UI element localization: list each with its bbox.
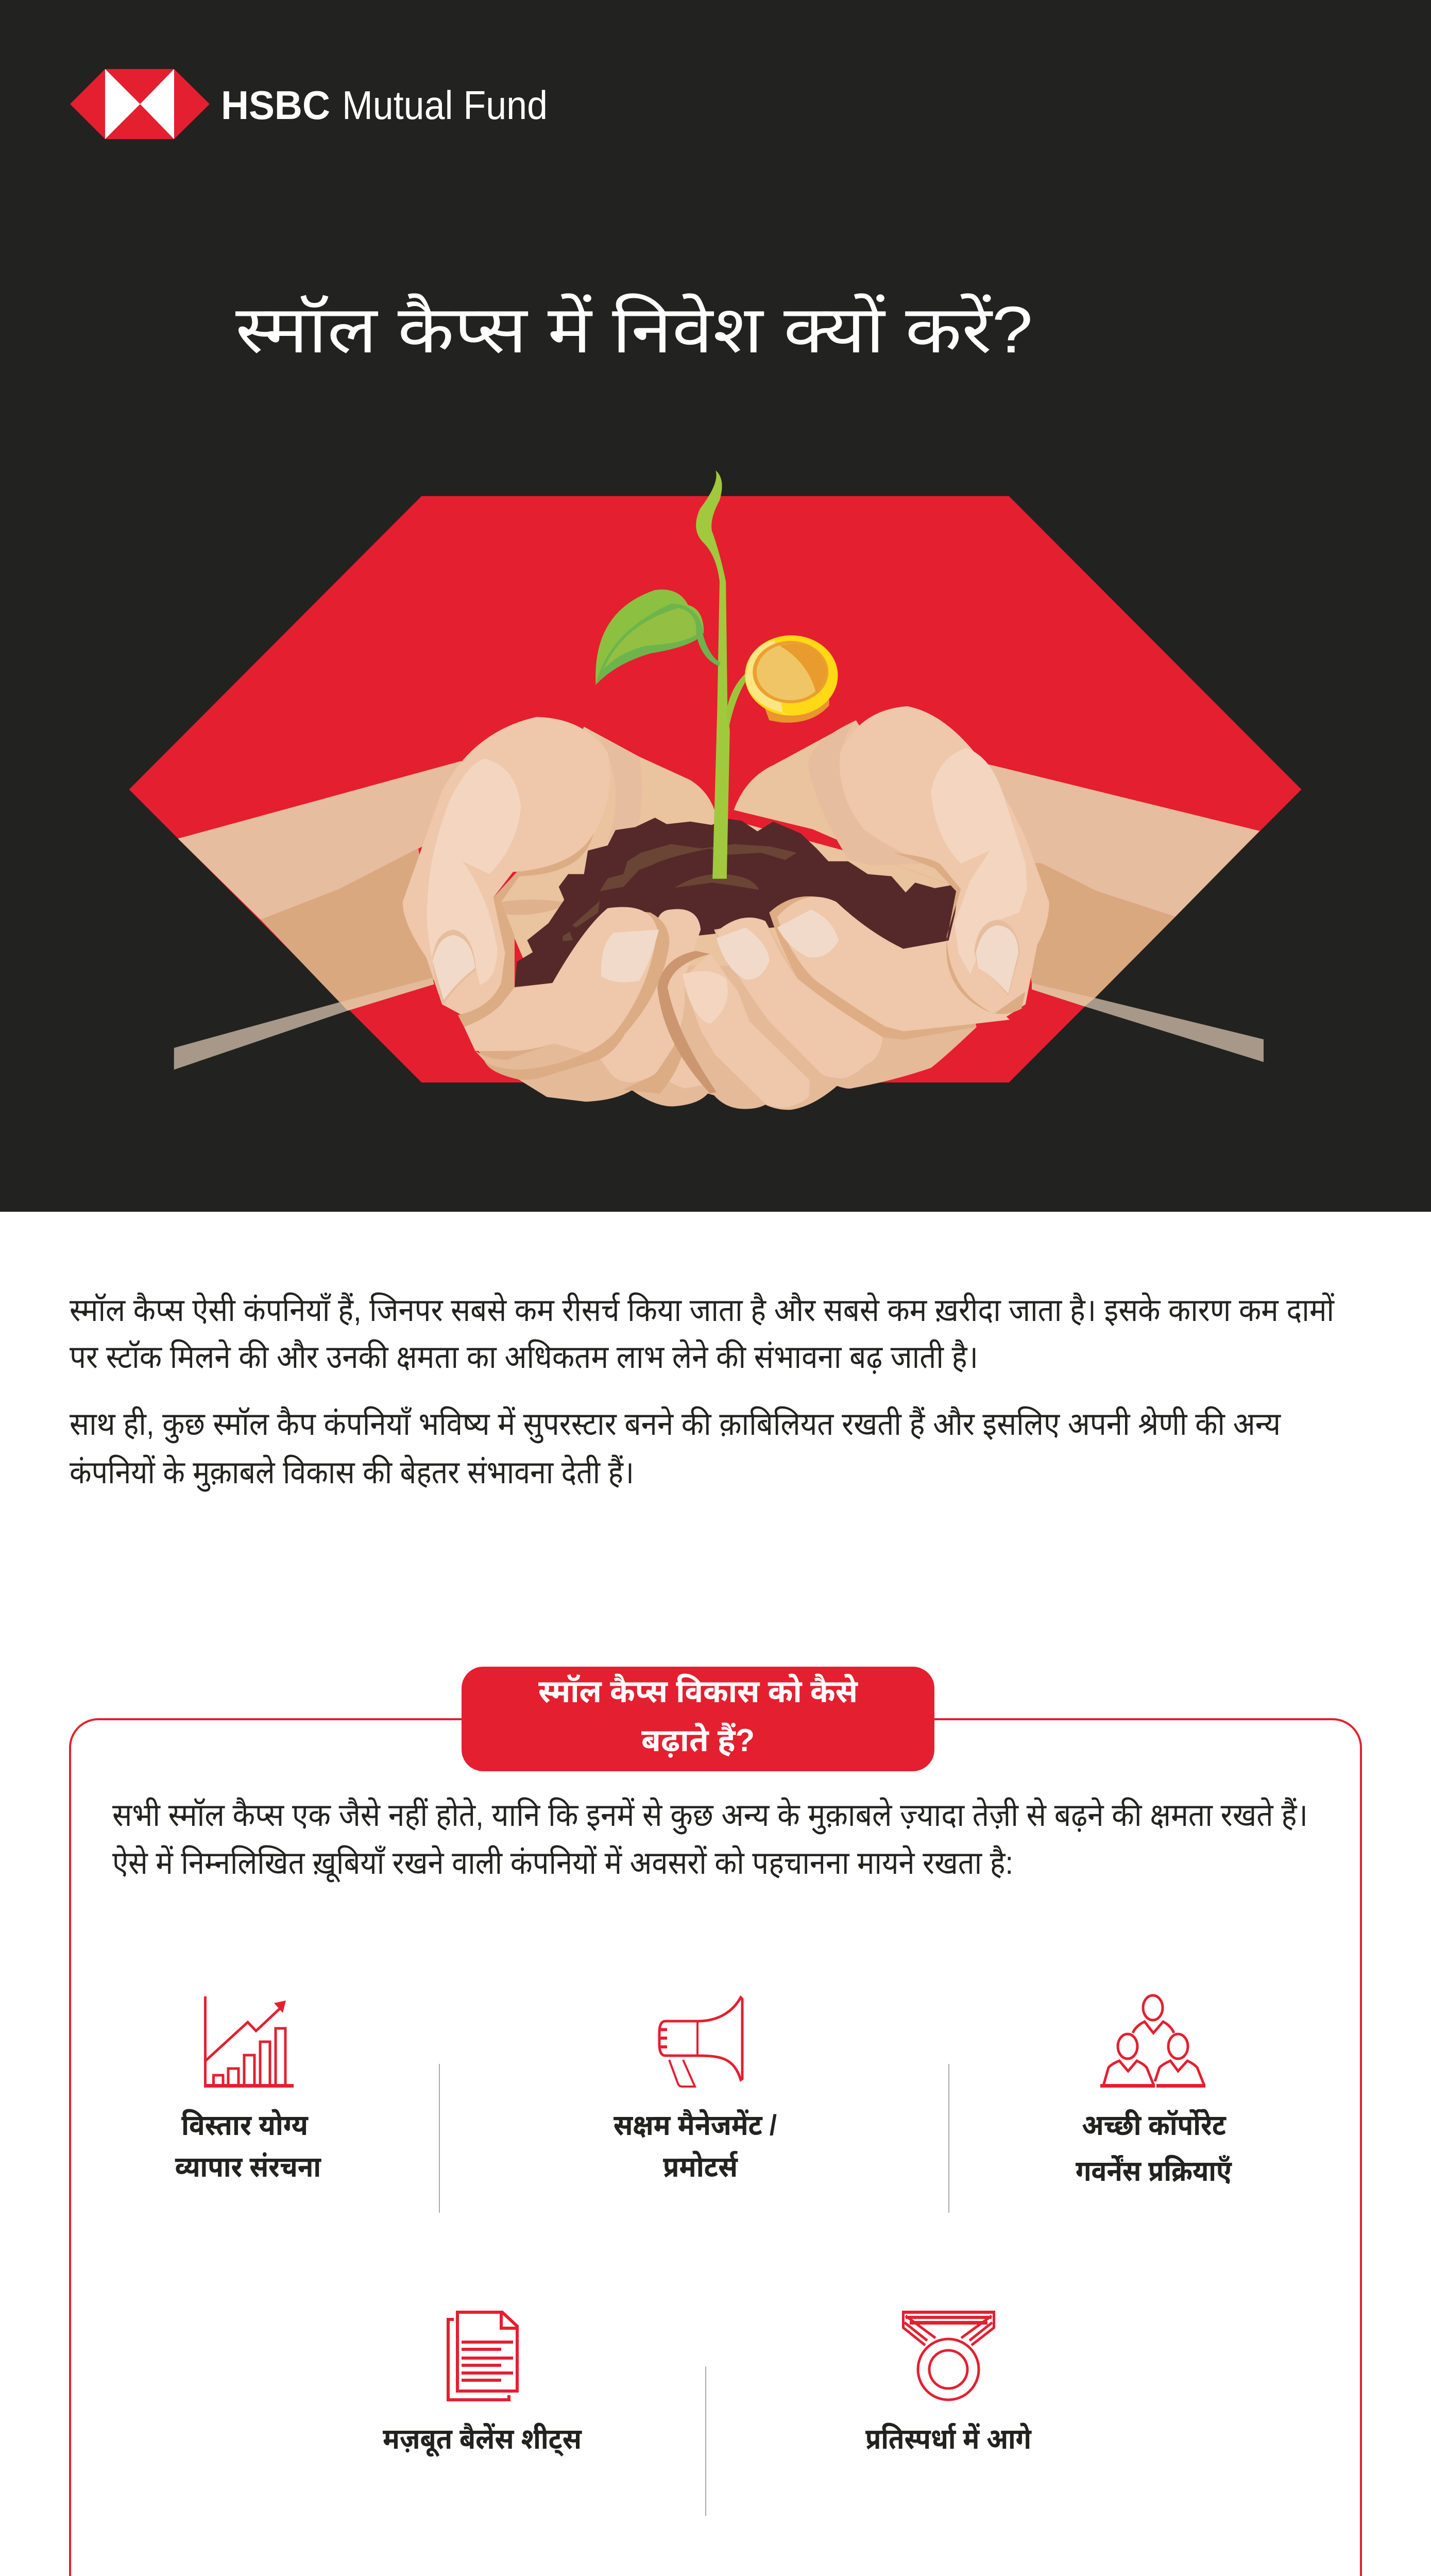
upper leaf and stem xyxy=(696,470,730,879)
label: सक्षम मैनेजमेंट / xyxy=(614,2109,777,2141)
panel intro text: सभी स्मॉल कैप्स एक जैसे नहीं होते, यानि कि इनमें से कुछ अन्य के मुक़ाबले ज़्यादा तेज़ी से बढ़ने की क्षमता रखते हैं। xyxy=(112,1797,1308,1835)
intro text xyxy=(70,1292,1335,1492)
icon: medal xyxy=(902,2311,995,2400)
icon: document xyxy=(448,2312,517,2400)
soil xyxy=(515,818,959,989)
paragraph 1: पर स्टॉक मिलने की और उनकी क्षमता का अधिकतम लाभ लेने की संभावना बढ़ जाती है। xyxy=(70,1338,978,1375)
title: स्मॉल कैप्स में निवेश क्यों करें? xyxy=(235,293,1033,367)
paragraph 1 xyxy=(70,1292,1335,1375)
seedling xyxy=(595,470,838,879)
tab heading: बढ़ाते हैं? xyxy=(641,1722,755,1758)
item: scalable business xyxy=(175,1996,321,2183)
back left finger xyxy=(656,909,701,1009)
paragraph 2: साथ ही, कुछ स्मॉल कैप कंपनियाँ भविष्य में सुपरस्टार बनने की क़ाबिलियत रखती हैं और इसलिए अपनी श्रेणी की अन्य xyxy=(70,1405,1281,1444)
paragraph 1: स्मॉल कैप्स ऐसी कंपनियाँ हैं, जिनपर सबसे कम रीसर्च किया जाता है और सबसे कम ख़रीदा जाता है। इसके कारण कम दामों xyxy=(70,1292,1335,1328)
coin stalk xyxy=(726,673,748,727)
right hand xyxy=(840,706,1049,1017)
logo: HSBC Mutual Fund xyxy=(70,69,548,139)
logo wordmark xyxy=(221,82,548,128)
second right finger xyxy=(714,921,883,1080)
panel intro text xyxy=(112,1797,1308,1883)
header panel xyxy=(0,0,1431,1212)
panel: how small caps grow xyxy=(70,1667,1361,2576)
item: capable management xyxy=(614,1997,777,2183)
label xyxy=(1076,2109,1232,2187)
red hexagon xyxy=(129,496,1302,1082)
item: ahead of competition xyxy=(865,2311,1032,2455)
side leaf xyxy=(595,589,704,685)
fingers xyxy=(459,896,1010,1110)
paragraph 2: कंपनियों के मुक़ाबले विकास की बेहतर संभावना देती हैं। xyxy=(70,1454,634,1492)
arms xyxy=(174,761,1264,1070)
tab heading xyxy=(462,1667,934,1771)
label xyxy=(614,2109,777,2183)
label: गवर्नेंस प्रक्रियाएँ xyxy=(1076,2155,1232,2187)
icon: growth chart xyxy=(204,1996,294,2088)
label: प्रमोटर्स xyxy=(663,2150,739,2183)
middle finger xyxy=(683,953,809,1108)
label: प्रतिस्पर्धा में आगे xyxy=(865,2422,1032,2455)
label: विस्तार योग्य xyxy=(181,2109,309,2141)
inner palms xyxy=(497,720,962,1009)
panel intro text: ऐसे में निम्नलिखित ख़ूबियाँ रखने वाली कंपनियों में अवसरों को पहचानना मायने रखता है: xyxy=(112,1844,1013,1883)
tab heading: स्मॉल कैप्स विकास को कैसे xyxy=(538,1673,858,1709)
label: व्यापार संरचना xyxy=(175,2150,321,2183)
logo wordmark: Mutual Fund xyxy=(342,82,548,128)
coin xyxy=(745,635,838,723)
item: strong balance sheets xyxy=(383,2312,582,2457)
petiole xyxy=(696,624,720,666)
item: corporate governance xyxy=(1076,1995,1232,2187)
logo wordmark: HSBC xyxy=(221,82,330,128)
left hand xyxy=(403,717,610,1027)
illustration: hands holding a seedling with coin xyxy=(129,470,1302,1110)
label: अच्छी कॉर्पोरेट xyxy=(1082,2109,1226,2141)
front right finger xyxy=(769,896,977,1040)
icon: megaphone xyxy=(658,1997,742,2087)
label xyxy=(175,2109,321,2183)
paragraph 2 xyxy=(70,1405,1281,1492)
icon: HSBC hexagon xyxy=(70,69,210,139)
icon: three people xyxy=(1100,1995,1205,2086)
label: मज़बूत बैलेंस शीट्स xyxy=(383,2422,582,2457)
